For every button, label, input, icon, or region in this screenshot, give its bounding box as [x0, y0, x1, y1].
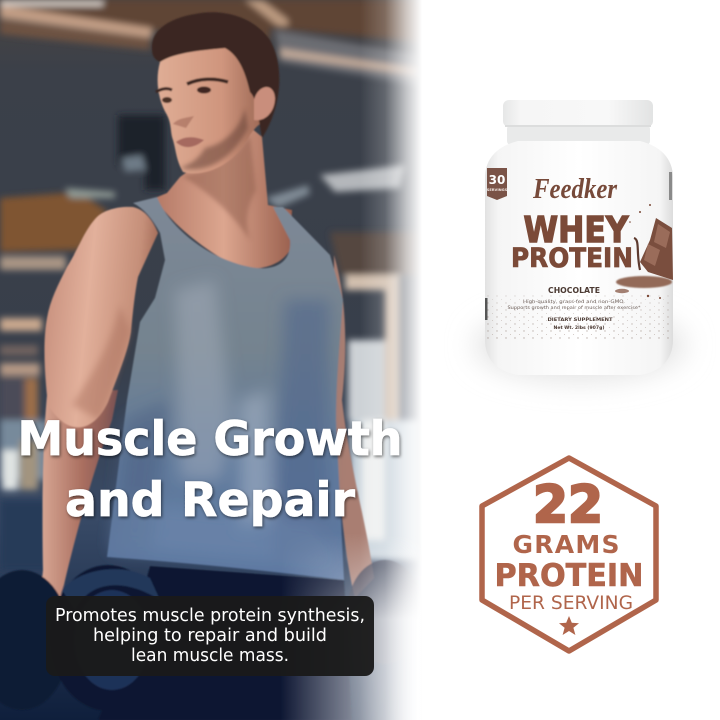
- right dumbbell: [347, 560, 423, 664]
- jar shadow: [475, 310, 685, 380]
- supplement facts text: [548, 317, 613, 331]
- number: 22: 22: [533, 476, 603, 535]
- right arm: [334, 255, 374, 598]
- supplement facts text: Net Wt. 2lbs (907g): [554, 325, 604, 331]
- left forearm and hand: [40, 390, 118, 645]
- label: PER SERVING: PER SERVING: [509, 592, 633, 614]
- white fade into the page: [360, 0, 422, 720]
- side code strip: [485, 298, 488, 320]
- hair: [152, 12, 279, 138]
- barcode edge: [669, 172, 672, 200]
- dotted label pattern: [486, 295, 672, 340]
- label: GRAMS: GRAMS: [512, 530, 620, 559]
- jar neck: [507, 125, 650, 145]
- jar cap: [503, 100, 653, 127]
- flavour: CHOCOLATE: CHOCOLATE: [548, 286, 600, 295]
- title: Muscle Growth and Repair: Muscle Growth: [18, 412, 402, 467]
- beard: [180, 108, 248, 169]
- callout: description box: Promotes muscle protein synthesis,: [55, 605, 365, 626]
- illustration: chocolate bar and splash: [615, 204, 673, 299]
- product: whey protein jar: [475, 100, 685, 380]
- supplement facts text: DIETARY SUPPLEMENT: [548, 317, 613, 323]
- athlete figure: [0, 12, 423, 720]
- badge: 30 servings: SERVINGS: [487, 188, 508, 192]
- callout: description box: lean muscle mass.: [131, 645, 289, 666]
- title: Muscle Growth and Repair: [18, 412, 402, 528]
- hexagon outline: [482, 458, 656, 651]
- brand: Feedker: Feedker: [532, 173, 618, 205]
- product name: PROTEIN: PROTEIN: [511, 243, 633, 274]
- product name: WHEY: WHEY: [524, 210, 629, 251]
- shadow under jaw: [182, 135, 256, 240]
- claim text: [508, 299, 641, 311]
- neck and chest: [155, 127, 292, 268]
- tank top: [107, 197, 344, 580]
- bicep shadow: [72, 305, 130, 420]
- badge: 30 servings: 30: [489, 173, 505, 187]
- icon: star: [559, 616, 579, 635]
- panel: gym photo of athlete: [0, 0, 420, 720]
- badge: 22 grams protein per serving: [482, 458, 656, 651]
- photo background: [0, 0, 430, 720]
- callout: description box: [46, 596, 374, 676]
- left upper arm and shoulder: [44, 207, 158, 427]
- left dumbbell: [0, 565, 166, 711]
- claim text: Supports growth and repair of muscle after exercise*: [508, 305, 641, 311]
- callout: description box: helping to repair and build: [93, 625, 327, 646]
- shirt highlights: [112, 280, 335, 570]
- jar body: [485, 141, 673, 375]
- badge: 30 servings: [487, 168, 508, 200]
- face: [158, 40, 275, 173]
- eyes and brows: [156, 79, 228, 147]
- label: PROTEIN: PROTEIN: [494, 558, 644, 594]
- pants: [98, 566, 352, 720]
- ear: [254, 87, 275, 120]
- title: Muscle Growth and Repair: and Repair: [65, 473, 356, 528]
- claim text: High-quality, grass-fed and non-GMO.: [523, 299, 625, 305]
